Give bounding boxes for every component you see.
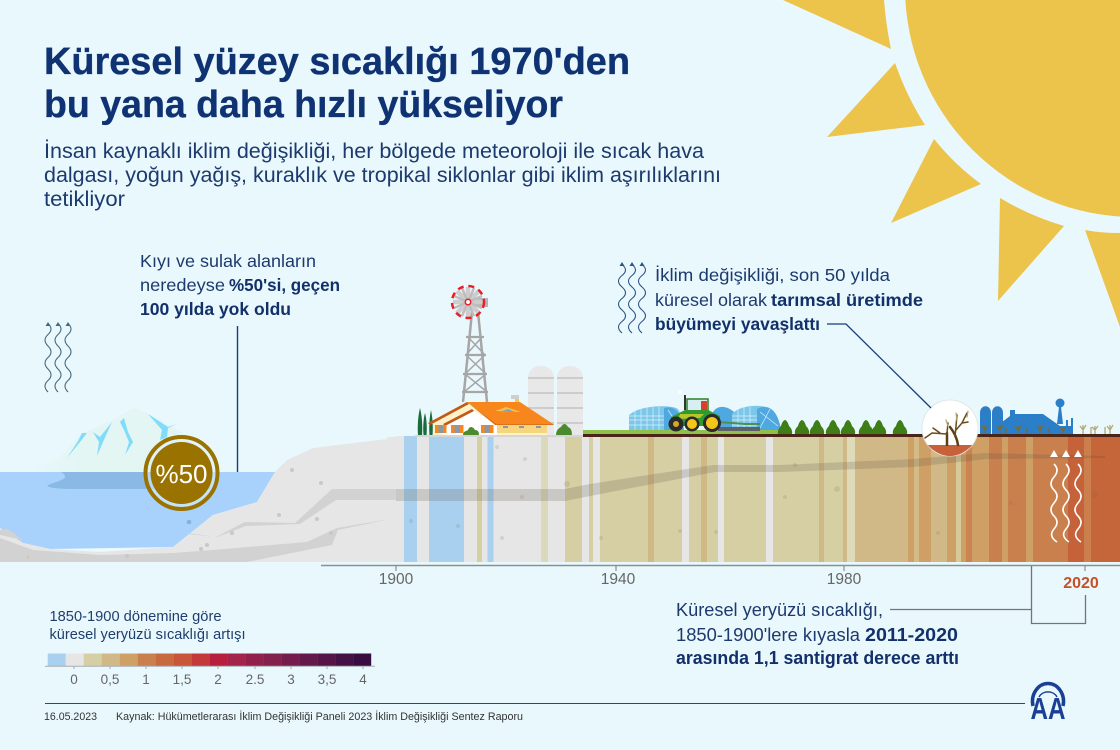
iceberg reflection <box>47 472 210 489</box>
timeline axis: 1940 <box>601 571 636 588</box>
legend title: küresel yeryüzü sıcaklığı artışı <box>50 627 246 643</box>
leader line: wetlands <box>220 326 238 473</box>
color legend: 2.5 <box>246 672 264 687</box>
color legend <box>45 654 375 687</box>
callout: temperature <box>676 600 959 668</box>
timeline axis: 1980 <box>827 571 862 588</box>
leader line: agriculture <box>827 324 931 408</box>
logo: AA: AA <box>1030 691 1066 726</box>
coastal land <box>0 436 420 562</box>
legend title: 1850-1900 dönemine göre <box>50 609 221 625</box>
legend title <box>50 609 246 643</box>
iceberg <box>23 408 205 472</box>
callout: agriculture <box>655 265 923 334</box>
title <box>44 41 630 126</box>
logo: AA <box>1030 683 1066 726</box>
callout: wetlands: %50'si, geçen <box>229 275 340 295</box>
title: Küresel yüzey sıcaklığı 1970'den <box>44 41 630 83</box>
heat waves agriculture <box>618 262 646 333</box>
ground strip <box>415 430 1120 437</box>
callout: wetlands: neredeyse <box>140 275 225 295</box>
dry plants <box>982 425 1113 434</box>
callout: temperature: arasında 1,1 santigrat derece arttı <box>676 648 959 668</box>
color legend: 4 <box>359 672 367 687</box>
callout: agriculture: İklim değişikliği, son 50 yılda <box>655 265 890 285</box>
intro text: İnsan kaynaklı iklim değişikliği, her bölgede meteoroloji ile sıcak hava <box>44 140 704 163</box>
intro text: dalgası, yoğun yağış, kuraklık ve tropikal siklonlar gibi iklim aşırılıklarını <box>44 164 721 187</box>
%50 badge <box>146 437 218 509</box>
callout: wetlands <box>140 251 340 319</box>
color legend: 3,5 <box>318 672 336 687</box>
strata band <box>396 453 1105 501</box>
callout: wetlands: 100 yılda yok oldu <box>140 299 291 319</box>
greenhouses <box>629 406 781 430</box>
color legend: 3 <box>287 672 295 687</box>
callout: agriculture: tarımsal üretimde <box>771 290 923 310</box>
bracket 2011-2020 <box>890 566 1086 624</box>
timeline axis: 1900 <box>379 571 414 588</box>
timeline axis: 2020 <box>1063 575 1099 592</box>
underwater sand <box>55 549 165 550</box>
color legend: 1,5 <box>173 672 191 687</box>
intro text <box>44 140 721 211</box>
windmill <box>452 286 488 402</box>
cypress trees <box>418 408 433 435</box>
water <box>0 472 275 549</box>
timeline axis <box>321 565 1120 592</box>
color legend: 1 <box>142 672 150 687</box>
color legend: 0 <box>70 672 78 687</box>
heat waves left <box>45 322 71 392</box>
color legend: 0,5 <box>101 672 119 687</box>
footer rule <box>45 702 1025 704</box>
rising heat arrows <box>1050 450 1082 542</box>
callout: wetlands: Kıyı ve sulak alanların <box>140 251 316 271</box>
title: bu yana daha hızlı yükseliyor <box>44 84 563 126</box>
footer text: Kaynak: Hükümetlerarası İklim Değişikliği Paneli 2023 İklim Değişikliği Sentez Raporu <box>116 710 523 723</box>
%50 badge: %50 <box>155 459 208 489</box>
blue farm silhouette <box>980 398 1073 434</box>
dead trees badge <box>922 400 978 456</box>
silos <box>528 366 583 435</box>
tree row <box>778 420 907 434</box>
callout: temperature: 1850-1900'lere kıyasla <box>676 625 861 645</box>
soil speckles <box>409 445 1098 540</box>
icon: sun <box>783 0 1120 327</box>
callout: temperature: Küresel yeryüzü sıcaklığı, <box>676 600 883 620</box>
farmhouse <box>428 395 554 435</box>
callout: temperature: 2011-2020 <box>865 625 958 645</box>
temperature stripes <box>396 436 1120 562</box>
intro text: tetikliyor <box>44 188 125 211</box>
tractor <box>668 390 760 432</box>
footer text: 16.05.2023 <box>44 711 97 723</box>
bushes <box>463 424 572 435</box>
callout: agriculture: küresel olarak <box>655 290 767 310</box>
color legend: 2 <box>214 672 222 687</box>
callout: agriculture: büyümeyi yavaşlattı <box>655 314 820 334</box>
